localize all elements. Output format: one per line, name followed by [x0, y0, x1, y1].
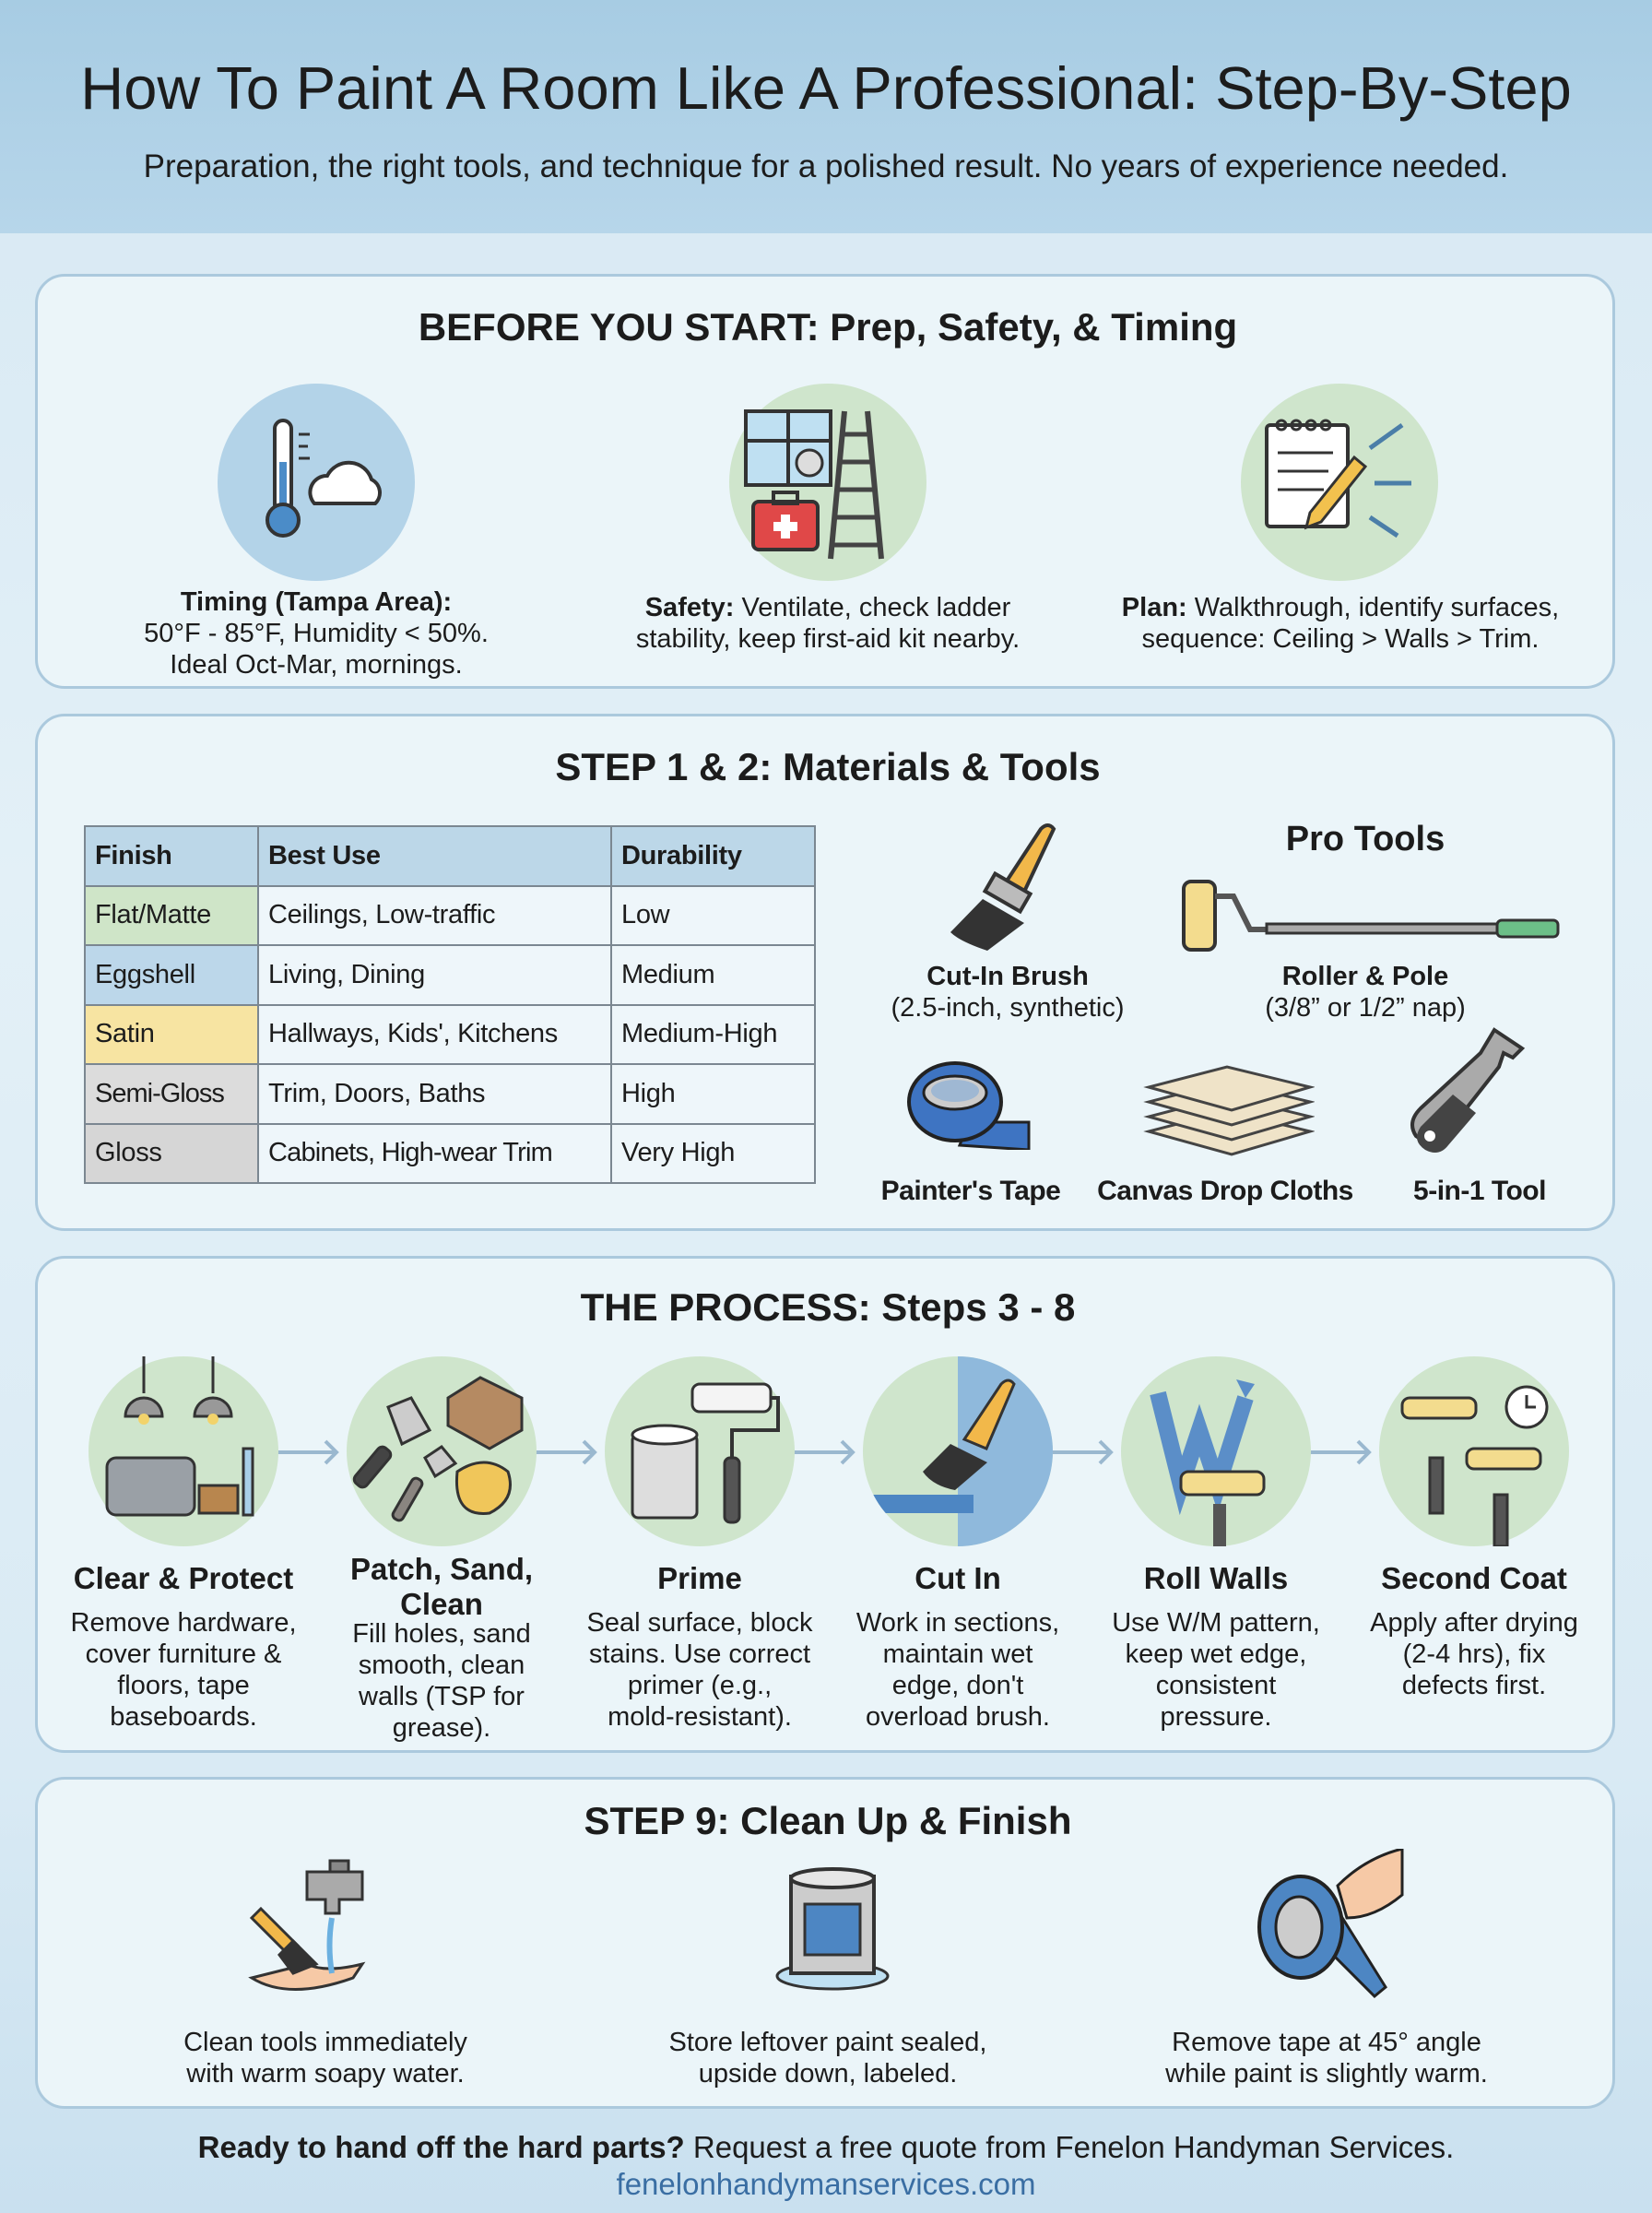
table: paint finishes: High	[621, 1079, 675, 1108]
text: safety: stability, keep first-aid kit nearby.	[636, 624, 1020, 654]
text: Work in sections,	[856, 1608, 1059, 1638]
step 8: second coat	[1370, 1356, 1578, 1700]
table: paint finishes: Flat/Matte	[95, 900, 211, 929]
text: timing	[144, 587, 489, 680]
table: paint finishes: Ceilings, Low-traffic	[268, 900, 495, 929]
text: primer (e.g.,	[628, 1671, 772, 1700]
step 7: roll walls	[1112, 1356, 1320, 1732]
step 5: prime	[586, 1356, 813, 1732]
table: paint finishes: Gloss	[95, 1138, 162, 1167]
text: store paint: upside down, labeled.	[699, 2059, 957, 2089]
text: overload brush.	[866, 1702, 1050, 1732]
arrows between steps	[278, 1440, 1372, 1464]
text: store paint	[669, 2028, 986, 2089]
table: paint finishes: Hallways, Kids', Kitchens	[268, 1019, 558, 1048]
icon: thermometer and cloud	[218, 384, 415, 581]
text	[352, 1619, 531, 1743]
text: Remove hardware,	[70, 1608, 297, 1638]
icon: W pattern roller	[1121, 1356, 1311, 1546]
text: timing: Timing (Tampa Area):	[181, 587, 452, 617]
text: Seal surface, block	[586, 1608, 813, 1638]
text: floors, tape	[117, 1671, 250, 1700]
label: roller and pole: (3/8” or 1/2” nap)	[1265, 993, 1466, 1023]
footer call to action: Ready to hand off the hard parts? Request a free quote from Fenelon Handyman Services.	[198, 2130, 1454, 2164]
table: paint finishes: Medium-High	[621, 1019, 777, 1048]
table: paint finishes: Living, Dining	[268, 960, 425, 989]
panel: the process	[35, 1256, 1615, 1753]
icon: paint can upside down	[776, 1867, 889, 1990]
text: grease).	[393, 1713, 490, 1743]
text: smooth, clean	[359, 1651, 525, 1680]
icon: painter's tape	[907, 1061, 1031, 1150]
text	[856, 1608, 1059, 1732]
title: Clear & Protect	[74, 1561, 293, 1595]
text: maintain wet	[883, 1639, 1032, 1669]
label: cut-in brush	[891, 962, 1125, 1023]
text: clean tools: with warm soapy water.	[186, 2059, 465, 2089]
text: plan	[1122, 593, 1559, 654]
title: Second Coat	[1381, 1561, 1567, 1595]
text: keep wet edge,	[1126, 1639, 1306, 1669]
text: defects first.	[1402, 1671, 1546, 1700]
title: Roll Walls	[1144, 1561, 1288, 1595]
text: walls (TSP for	[359, 1682, 525, 1711]
table: paint finishes: Eggshell	[95, 960, 195, 989]
heading: THE PROCESS: Steps 3 - 8	[581, 1285, 1075, 1329]
table: paint finishes: Best Use	[268, 841, 381, 870]
text: Fill holes, sand	[352, 1619, 531, 1649]
text: remove tape	[1165, 2028, 1488, 2089]
icon: roller and pole	[1182, 880, 1560, 952]
title: Cut In	[914, 1561, 1001, 1595]
icon: faucet and brush	[248, 1859, 365, 1991]
label: roller and pole: Roller & Pole	[1282, 962, 1448, 991]
table: paint finishes: Durability	[621, 841, 742, 870]
subtitle: Preparation, the right tools, and technique for a polished result. No years of experience needed.	[144, 148, 1508, 184]
title: Prime	[657, 1561, 742, 1595]
text: Use W/M pattern,	[1112, 1608, 1320, 1638]
label: cut-in brush: (2.5-inch, synthetic)	[891, 993, 1125, 1023]
heading: STEP 1 & 2: Materials & Tools	[555, 745, 1101, 788]
text: remove tape: while paint is slightly warm.	[1165, 2059, 1488, 2089]
table: paint finishes: Semi-Gloss	[95, 1079, 224, 1108]
text: cover furniture &	[86, 1639, 281, 1669]
title: Clean	[400, 1587, 483, 1621]
icon: primer can and roller	[605, 1356, 795, 1546]
text: pressure.	[1161, 1702, 1271, 1732]
table: paint finishes: Satin	[95, 1019, 155, 1048]
table: paint finishes: Very High	[621, 1138, 735, 1167]
icon: putty knife sponge	[347, 1356, 537, 1546]
heading: BEFORE YOU START: Prep, Safety, & Timing	[419, 305, 1237, 349]
icon: drop cloths	[1143, 1066, 1315, 1156]
text: clean tools	[183, 2028, 467, 2089]
text: safety	[636, 593, 1020, 654]
text: Apply after drying	[1370, 1608, 1578, 1638]
text	[1112, 1608, 1320, 1732]
title: How To Paint A Room Like A Professional: Step-By-Step	[80, 54, 1572, 122]
text: remove tape: Remove tape at 45° angle	[1172, 2028, 1481, 2057]
label: roller and pole	[1265, 962, 1466, 1023]
panel: before you start	[35, 274, 1615, 689]
text: timing: 50°F - 85°F, Humidity < 50%.	[144, 619, 489, 648]
label: cut-in brush: Cut-In Brush	[926, 962, 1089, 991]
title	[350, 1552, 533, 1621]
step 3: clear and protect	[70, 1356, 297, 1732]
panel: materials and tools	[35, 714, 1615, 1231]
label: drop cloths: Canvas Drop Cloths	[1097, 1176, 1353, 1206]
step 4: patch sand clean	[347, 1356, 537, 1743]
text	[70, 1608, 297, 1732]
text	[586, 1608, 813, 1732]
label: 5-in-1 tool: 5-in-1 Tool	[1413, 1176, 1546, 1206]
icon: brush corner	[863, 1356, 1053, 1546]
text: edge, don't	[892, 1671, 1023, 1700]
icon: window ladder first aid	[729, 384, 926, 581]
text: timing: Ideal Oct-Mar, mornings.	[170, 650, 463, 680]
table: paint finishes: Cabinets, High-wear Trim	[268, 1138, 552, 1167]
heading: pro tools: Pro Tools	[1286, 820, 1445, 858]
header band	[0, 0, 1652, 233]
icon: 5-in-1 tool	[1410, 1027, 1525, 1153]
icon: furniture	[88, 1356, 278, 1546]
panel: clean up	[35, 1777, 1615, 2109]
icon: cut-in brush	[950, 823, 1056, 951]
text: (2-4 hrs), fix	[1403, 1639, 1545, 1669]
text: baseboards.	[110, 1702, 257, 1732]
title: Patch, Sand,	[350, 1552, 533, 1586]
footer url: fenelonhandymanservices.com	[617, 2167, 1035, 2201]
text: consistent	[1156, 1671, 1276, 1700]
table: paint finishes: Low	[621, 900, 669, 929]
table: paint finishes: Finish	[95, 841, 172, 870]
table: paint finishes: Medium	[621, 960, 714, 989]
icon: plan notepad	[1241, 384, 1438, 581]
step 6: cut in	[856, 1356, 1059, 1732]
text: clean tools: Clean tools immediately	[183, 2028, 467, 2057]
text: plan: Plan: Walkthrough, identify surfaces,	[1122, 593, 1559, 622]
text: stains. Use correct	[589, 1639, 810, 1669]
table: paint finishes: Trim, Doors, Baths	[268, 1079, 485, 1108]
label: painter's tape: Painter's Tape	[881, 1176, 1060, 1206]
text: store paint: Store leftover paint sealed,	[669, 2028, 986, 2057]
icon: two rollers clock	[1379, 1356, 1569, 1546]
text: plan: sequence: Ceiling > Walls > Trim.	[1142, 624, 1539, 654]
icon: tape removal	[1257, 1849, 1403, 1998]
table: paint finishes	[84, 825, 816, 1184]
heading: STEP 9: Clean Up & Finish	[584, 1799, 1071, 1842]
text: safety: Safety: Ventilate, check ladder	[645, 593, 1010, 622]
text: mold-resistant).	[608, 1702, 792, 1732]
text	[1370, 1608, 1578, 1700]
